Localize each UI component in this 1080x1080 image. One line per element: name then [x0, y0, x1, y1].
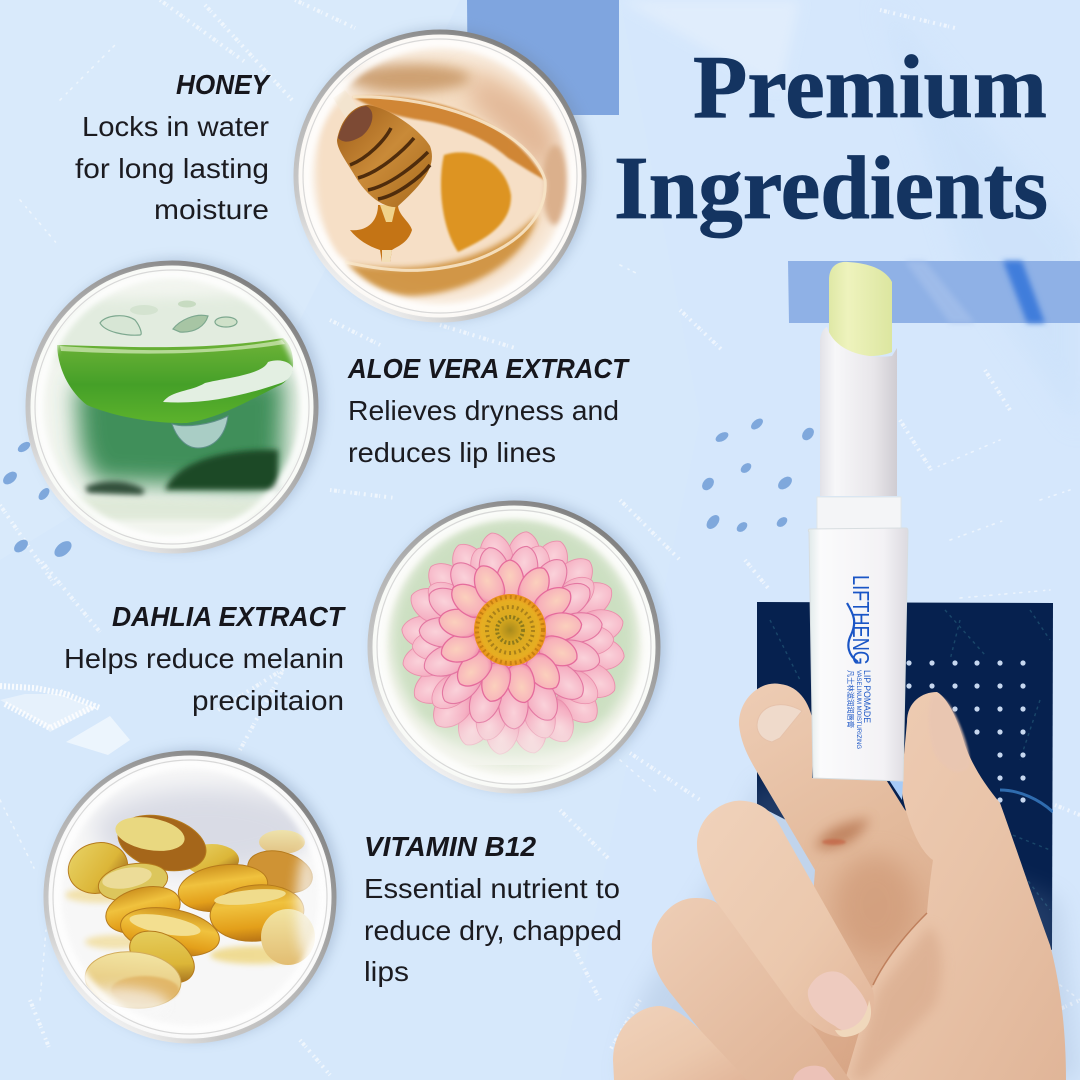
text: aloe vera: Relieves dryness and — [348, 395, 619, 426]
text: honey: Locks in water — [82, 111, 269, 142]
navy panel — [757, 602, 1053, 950]
collar — [817, 497, 901, 530]
title: Ingredients — [614, 139, 1048, 238]
product logo text: LIP POMADE — [861, 670, 872, 723]
ingredient: honey circle — [296, 28, 591, 320]
ingredient: aloe vera circle — [28, 259, 323, 551]
product logo text: 凡士林滋润润唇膏 — [846, 670, 856, 728]
text: honey: moisture — [154, 194, 269, 225]
gap between finger and thumb — [889, 780, 903, 800]
pinky finger — [613, 1006, 747, 1080]
white burst: lower left — [0, 686, 130, 755]
dot grid — [906, 660, 1026, 803]
text: dahlia — [64, 601, 347, 716]
ingredient: vitamin B12 circle — [46, 749, 341, 1041]
ingredient: dahlia circle — [370, 499, 665, 791]
aloe body — [75, 375, 285, 488]
text: vitamin B12 — [364, 831, 622, 987]
text: aloe vera: ALOE VERA EXTRACT — [347, 353, 631, 384]
product logo text — [846, 575, 874, 749]
text: aloe vera — [347, 353, 631, 468]
ring finger — [652, 898, 850, 1080]
honey dipper — [333, 90, 432, 207]
text: vitamin B12: reduce dry, chapped — [364, 915, 622, 946]
droplets — [100, 300, 237, 335]
title: Premium — [693, 38, 1047, 137]
aloe leaf — [57, 338, 293, 423]
honey drip — [350, 205, 412, 262]
tube base — [808, 528, 908, 781]
text: dahlia: precipitaion — [192, 685, 344, 716]
middle nail — [808, 971, 869, 1031]
flower — [400, 530, 626, 756]
text: vitamin B12: lips — [364, 956, 409, 987]
title — [614, 38, 1048, 238]
text: honey — [75, 69, 271, 225]
index finger and palm back — [739, 683, 1000, 1080]
bowl back band — [353, 96, 545, 180]
blue tape: right band — [788, 261, 1080, 323]
lip balm product — [808, 262, 908, 781]
product logo text: LIFTHENG — [848, 575, 874, 665]
text: vitamin B12: VITAMIN B12 — [364, 831, 536, 862]
hand — [613, 683, 1066, 1080]
inner tube — [820, 327, 897, 496]
blue tape: top — [467, 0, 619, 115]
text: aloe vera: reduces lip lines — [348, 437, 556, 468]
ring nail — [793, 1066, 835, 1080]
balm bullet — [829, 262, 892, 356]
thumb and palm — [845, 692, 1066, 1080]
hand shadow — [620, 780, 1080, 1080]
blue brush dashes right — [700, 416, 816, 534]
middle finger — [697, 801, 874, 1037]
text: dahlia: DAHLIA EXTRACT — [112, 601, 347, 632]
index nail — [757, 705, 802, 742]
product logo text: VASELINUM MOISTURIZING — [855, 670, 862, 749]
flower centre — [474, 594, 546, 666]
text: honey: HONEY — [176, 69, 271, 100]
text: vitamin B12: Essential nutrient to — [364, 873, 620, 904]
blue brush dashes left — [1, 440, 75, 560]
text: dahlia: Helps reduce melanin — [64, 643, 344, 674]
capsules — [63, 806, 317, 1012]
text: honey: for long lasting — [75, 153, 269, 184]
